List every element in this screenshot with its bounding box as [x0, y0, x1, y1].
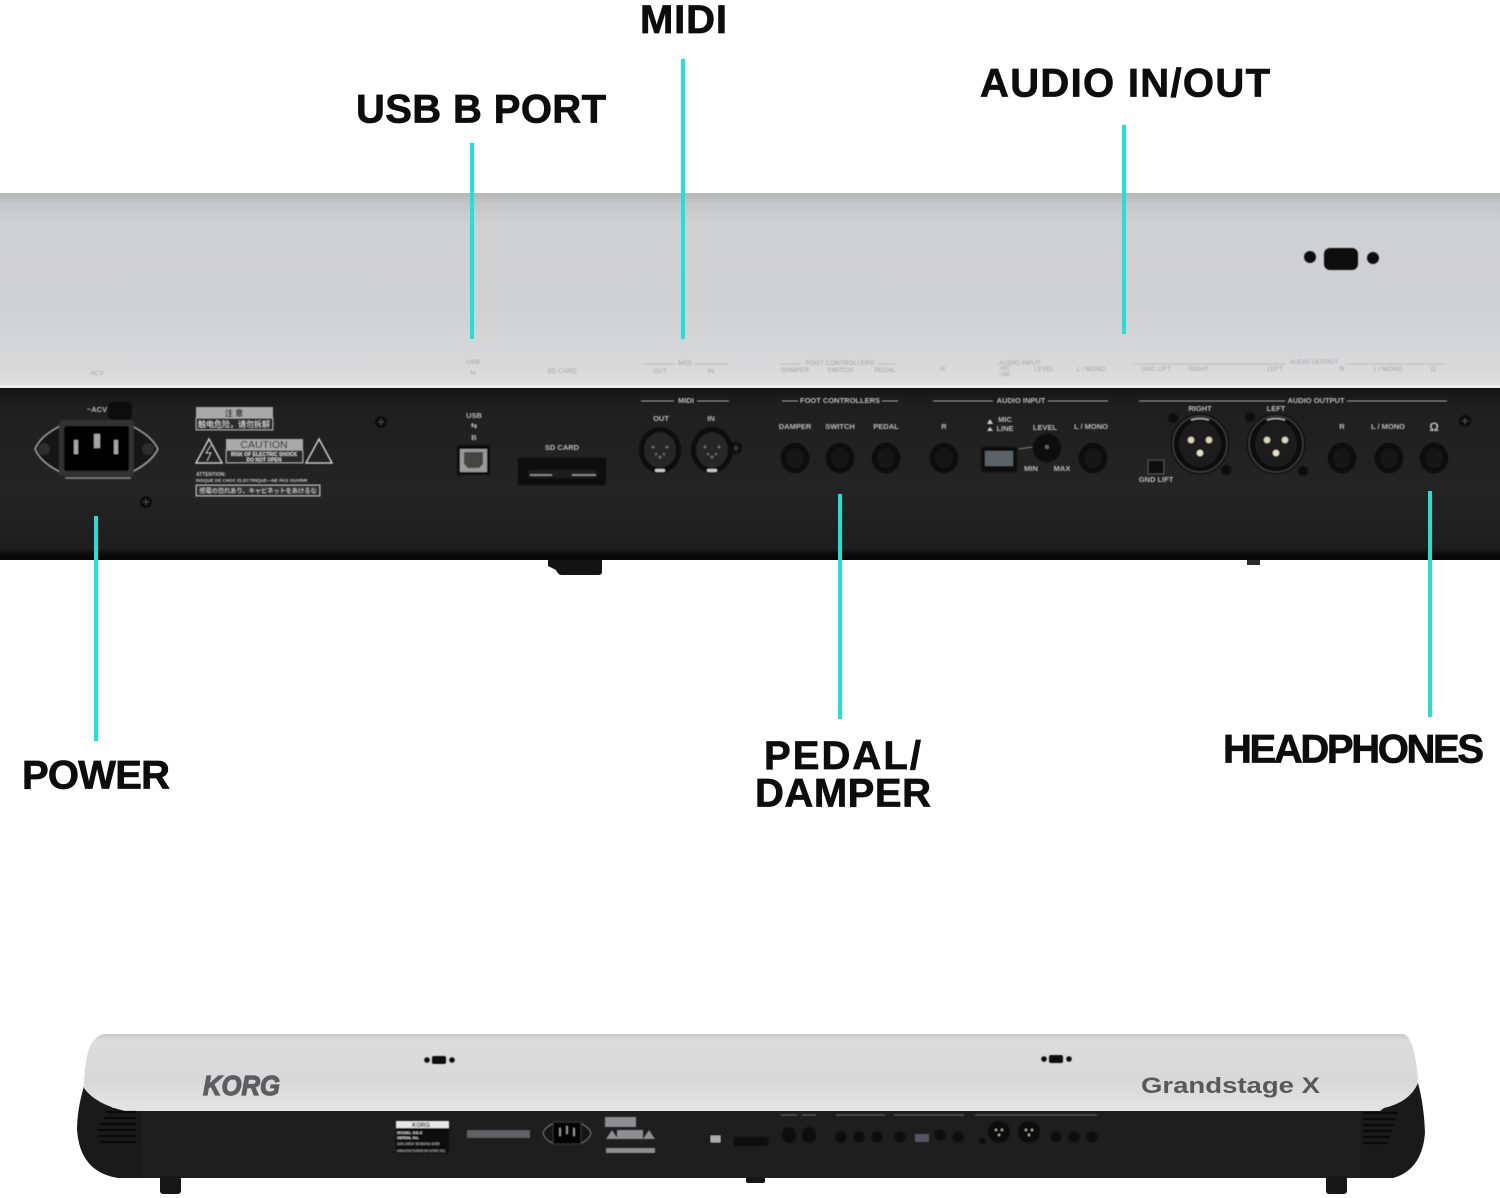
label: PEDAL/DAMPER: PEDAL/: [764, 734, 921, 778]
audio input: MAX: [1054, 464, 1070, 473]
silkscreen labels on grey body: ⇆: [470, 370, 476, 377]
audio input: AUDIO INPUT: [997, 396, 1046, 405]
vents: [98, 1112, 1398, 1143]
silkscreen labels on grey body: AUDIO INPUT: [999, 360, 1041, 367]
audio input: [930, 396, 1108, 473]
warning labels: CAUTION: [240, 439, 288, 451]
audio output: L / MONO: [1371, 422, 1405, 431]
MIDI ports: IN: [707, 414, 715, 423]
silkscreen labels on grey body: R: [1340, 366, 1345, 373]
warning labels: [196, 407, 332, 496]
foot controller jacks: FOOT CONTROLLERS: [800, 396, 880, 405]
warning labels: 感電の恐れあり、キャビネットをあけるな: [199, 487, 317, 495]
MIDI ports: [639, 396, 733, 473]
silkscreen labels on grey body: RIGHT: [1189, 366, 1209, 373]
silkscreen labels on grey body: Ω: [1431, 366, 1436, 373]
audio input: L / MONO: [1074, 422, 1108, 431]
silkscreen labels on grey body: GND LIFT: [1141, 366, 1171, 373]
silkscreen labels on grey body: USB: [466, 359, 480, 366]
full keyboard rear view: [77, 1034, 1425, 1194]
music stand mount: [1304, 248, 1379, 270]
warning labels: RISQUE DE CHOC ELECTRIQUE—NE PAS OUVRIR: [196, 478, 308, 483]
silkscreen labels on grey body: MIC: [1000, 366, 1010, 372]
silkscreen labels on grey body: ACV: [90, 370, 104, 377]
silkscreen labels on grey body: SD CARD: [547, 368, 577, 375]
USB B port: USB: [466, 411, 482, 420]
silkscreen labels on grey body: OUT: [653, 368, 667, 375]
mini warning labels: [605, 1117, 655, 1153]
foot controller jacks: PEDAL: [873, 422, 899, 431]
label: PEDAL/DAMPER: [755, 734, 931, 816]
silkscreen labels on grey body: FOOT CONTROLLERS: [806, 360, 875, 367]
silkscreen labels on grey body: MIDI: [678, 360, 692, 367]
logo: Grandstage X: Grandstage X: [1141, 1073, 1320, 1098]
silkscreen labels on grey body: R: [941, 366, 946, 373]
mini power inlet: [543, 1122, 591, 1144]
audio output: GND LIFT: [1139, 475, 1174, 484]
silkscreen labels on grey body: SWITCH: [827, 367, 853, 374]
small foot: [1247, 560, 1260, 565]
label: AUDIO IN/OUT: AUDIO IN/OUT: [980, 62, 1270, 106]
regulatory text block: [467, 1130, 530, 1138]
warning labels: 触电危险，请勿拆解: [198, 419, 270, 429]
feet: [160, 1176, 1347, 1194]
silkscreen labels on grey body: LEFT: [1267, 366, 1283, 373]
USB B port: [457, 411, 490, 475]
silkscreen labels on grey body: [90, 359, 1445, 378]
model label: MANUFACTURED BY KORG INC.: [397, 1149, 446, 1153]
model label: KORG: [412, 1123, 430, 1129]
audio input: MIC: [998, 415, 1012, 424]
audio output: LEFT: [1267, 404, 1286, 413]
grey top shell: [84, 1034, 1418, 1111]
callout lines: [96, 59, 1430, 741]
label: POWER: POWER: [22, 754, 170, 798]
model label: MODEL GS-X: [397, 1130, 423, 1135]
silkscreen labels on grey body: LINE: [999, 372, 1011, 378]
audio input: LINE: [996, 424, 1014, 433]
SD card slot: [518, 443, 606, 485]
MIDI ports: OUT: [653, 414, 669, 423]
audio input: MIN: [1024, 464, 1038, 473]
black connector panel: [0, 388, 1500, 560]
silkscreen labels on grey body: LEVEL: [1034, 366, 1054, 373]
warning labels: 注 意: [225, 408, 243, 418]
warning labels: DO NOT OPEN: [246, 458, 282, 464]
USB B port: ⇆: [471, 421, 478, 430]
foot controller jacks: [779, 396, 900, 473]
audio output: R: [1339, 422, 1345, 431]
mini connectors: [710, 1115, 1098, 1146]
logo: KORG: KORG: [203, 1070, 280, 1101]
silkscreen labels on grey body: DAMPER: [781, 367, 809, 374]
silkscreen labels on grey body: IN: [708, 368, 715, 375]
audio input: LEVEL: [1033, 423, 1058, 432]
panel highlight edge: [0, 385, 1500, 388]
SD card slot: SD CARD: [545, 443, 580, 452]
power inlet: ~ACV: [87, 405, 107, 414]
silkscreen labels on grey body: L / MONO: [1373, 366, 1403, 373]
model label: 100-240V 50/60Hz 60W: [397, 1141, 440, 1146]
panel screws: [140, 415, 1471, 508]
model label: SERIAL No.: [397, 1135, 419, 1140]
USB B port: B: [471, 433, 477, 442]
warning labels: ATTENTION:: [196, 472, 226, 478]
stand mounts: [424, 1055, 1072, 1064]
label: PEDAL/DAMPER: DAMPER: [755, 772, 931, 816]
keyboard rear close-up: [0, 193, 1500, 575]
audio output: Ω: [1429, 420, 1439, 434]
model label: [396, 1121, 449, 1153]
warning labels: RISK OF ELECTRIC SHOCK: [231, 452, 297, 458]
centre foot: [548, 560, 602, 575]
silkscreen labels on grey body: AUDIO OUTPUT: [1289, 359, 1339, 366]
MIDI ports: MIDI: [678, 396, 694, 405]
audio output: AUDIO OUTPUT: [1287, 396, 1345, 405]
label: HEADPHONES: HEADPHONES: [1223, 728, 1484, 772]
silkscreen labels on grey body: PEDAL: [874, 367, 896, 374]
black end caps: [77, 1083, 1425, 1178]
foot controller jacks: DAMPER: [779, 422, 812, 431]
label: USB B PORT: USB B PORT: [356, 88, 606, 132]
back panel: [141, 1110, 1359, 1178]
power inlet: [35, 402, 158, 479]
audio output: [1139, 396, 1448, 484]
audio input: R: [941, 422, 947, 431]
silkscreen labels on grey body: L / MONO: [1076, 366, 1106, 373]
audio output: RIGHT: [1188, 404, 1212, 413]
upper grey body: [0, 193, 1500, 388]
foot controller jacks: SWITCH: [825, 422, 855, 431]
